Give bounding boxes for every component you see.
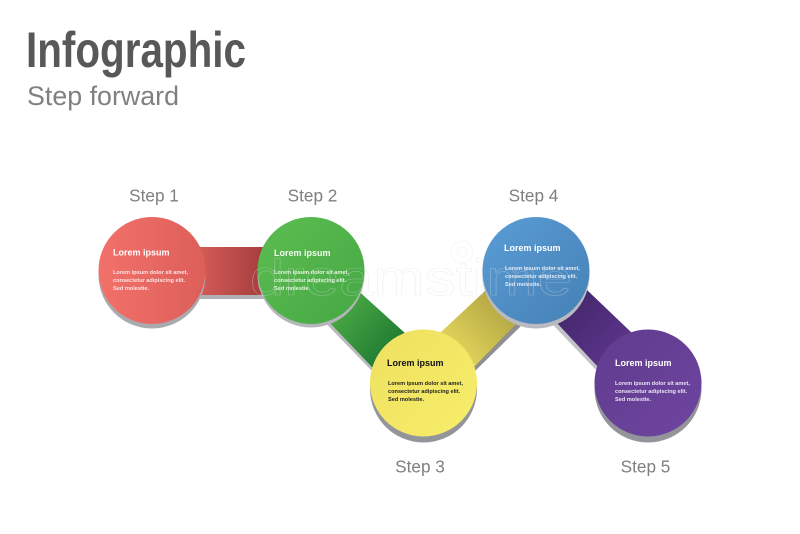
- step 1 circle: Lorem ipsum dolor sit amet,: [113, 270, 188, 276]
- connector: green to yellow: [309, 276, 425, 395]
- step 2 circle: consectetur adipiscing elit.: [274, 278, 347, 284]
- connector: red to green: [190, 247, 265, 299]
- step 5 circle: Lorem ipsum: [615, 358, 672, 368]
- step 4 circle: Lorem ipsum dolor sit amet,: [505, 266, 580, 272]
- step labels: Step 5: [621, 456, 670, 476]
- step 5 circle: [594, 330, 702, 442]
- step labels: Step 2: [288, 186, 337, 206]
- subtitle: Step forward: [27, 81, 179, 111]
- step labels: [129, 186, 670, 476]
- step 5 circle: consectetur adipiscing elit.: [615, 389, 688, 395]
- step 1 circle: Lorem ipsum: [113, 248, 170, 258]
- connector: blue to purple: [540, 275, 650, 395]
- step 5 circle: Lorem ipsum dolor sit amet,: [615, 381, 690, 387]
- step 4 circle: [482, 217, 590, 328]
- step 5 circle: Sed molestie.: [615, 397, 652, 403]
- step 4 circle: consectetur adipiscing elit.: [505, 274, 578, 280]
- step labels: Step 1: [129, 186, 179, 206]
- step 1 circle: consectetur adipiscing elit.: [113, 278, 186, 284]
- step 4 circle: Lorem ipsum: [504, 243, 561, 253]
- step 2 circle: [258, 217, 364, 328]
- step 3 circle: Lorem ipsum: [387, 358, 444, 368]
- step labels: Step 3: [395, 456, 445, 476]
- step 3 circle: consectetur adipiscing elit.: [388, 389, 461, 395]
- step 3 circle: Sed molestie.: [388, 397, 425, 403]
- step 1 circle: Sed molestie.: [113, 286, 150, 292]
- connector: yellow to blue: [425, 277, 535, 395]
- watermark: [250, 241, 572, 306]
- step 2 circle: Lorem ipsum: [274, 248, 331, 258]
- title: Infographic: [26, 22, 246, 78]
- step 1 circle: [98, 217, 206, 328]
- watermark: dreamstime: [250, 250, 572, 306]
- step 3 circle: [370, 330, 477, 442]
- step 4 circle: Sed molestie.: [505, 282, 542, 288]
- step 2 circle: Sed molestie.: [274, 286, 311, 292]
- step 2 circle: Lorem ipsum dolor sit amet,: [274, 270, 349, 276]
- step 3 circle: Lorem ipsum dolor sit amet,: [388, 381, 463, 387]
- step labels: Step 4: [509, 186, 559, 206]
